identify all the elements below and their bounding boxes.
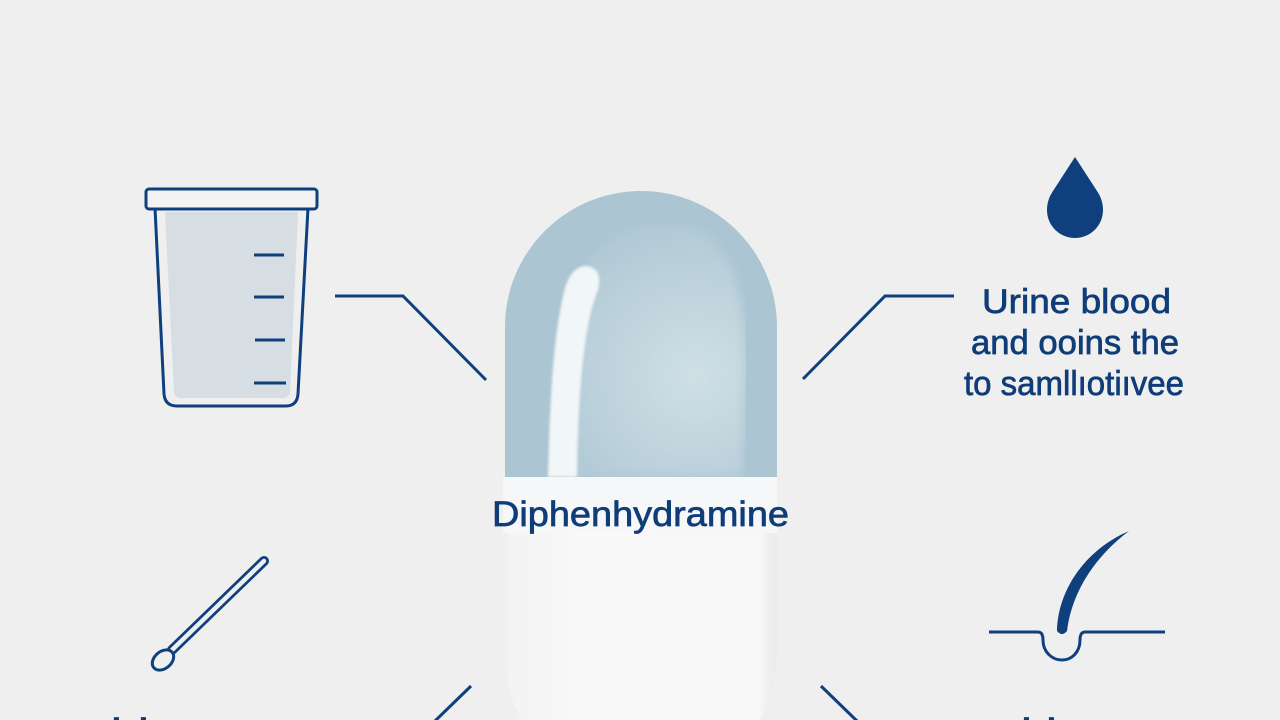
text: urine blood label — [964, 283, 1184, 403]
cup lid — [146, 189, 317, 209]
arrow: hair to capsule — [821, 686, 857, 720]
icon: cotton swab — [148, 561, 264, 674]
central capsule — [492, 191, 789, 720]
cup measuring marks — [254, 255, 286, 383]
capsule inner glow — [570, 223, 746, 477]
drug name: Diphenhydramine — [492, 495, 789, 534]
capsule upper blue half — [505, 191, 777, 477]
text: urine blood label: Urine blood — [982, 283, 1171, 321]
arrow: cup to capsule — [335, 296, 486, 380]
icon: specimen cup — [146, 189, 317, 406]
icon: hair follicle — [989, 531, 1165, 660]
arrow: drop to capsule — [803, 296, 954, 379]
icon: blood drop — [1047, 157, 1103, 238]
arrow: swab to capsule — [435, 686, 471, 720]
cup liquid — [165, 212, 298, 398]
text: urine blood label: and ooins the — [971, 324, 1179, 362]
cup body — [155, 208, 308, 406]
text: urine blood label: to samllıotiıvee — [964, 365, 1184, 403]
capsule lower white half — [503, 477, 777, 720]
hair strand — [1057, 531, 1129, 634]
capsule highlight — [548, 266, 599, 477]
skin line — [989, 632, 1165, 660]
capsule seam band — [503, 477, 777, 533]
